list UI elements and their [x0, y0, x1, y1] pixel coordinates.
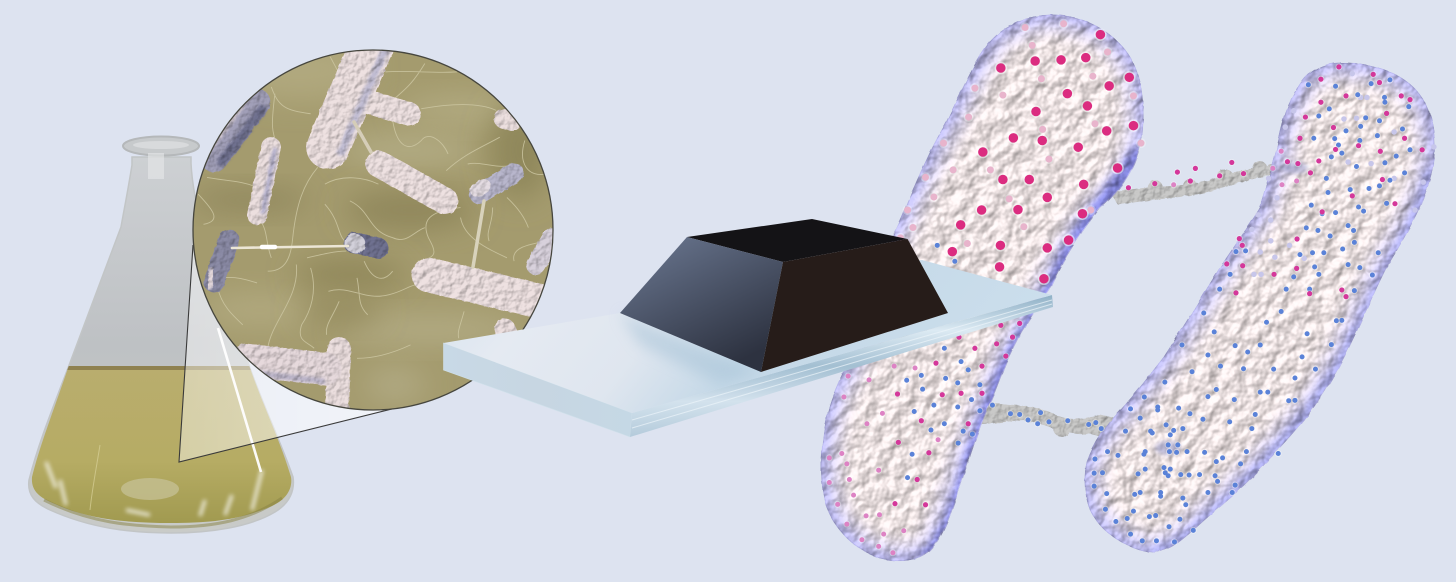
slide left edge	[444, 343, 632, 437]
chip right face	[761, 239, 948, 372]
liquid clouds	[190, 40, 552, 412]
slide top surface	[444, 260, 1052, 413]
glass slide	[444, 260, 1053, 437]
flask glass body	[29, 157, 293, 533]
pale pink dots	[900, 24, 1141, 243]
magenta dots	[895, 67, 1422, 505]
large magenta dots	[952, 35, 1133, 279]
pili between cells	[232, 122, 484, 267]
liquid	[32, 366, 291, 527]
blue dots	[907, 80, 1410, 542]
right bacterium	[1085, 63, 1434, 555]
pilus top	[1110, 158, 1292, 205]
magnification cone	[179, 245, 396, 462]
flask	[29, 136, 293, 533]
lavender dots	[1252, 74, 1434, 274]
flagella	[198, 57, 546, 358]
left bacterium	[821, 15, 1292, 561]
magnified circle	[190, 40, 553, 412]
chip: black trapezoid block	[620, 219, 948, 372]
junction shadows	[1155, 162, 1308, 455]
streak	[218, 328, 261, 472]
light magenta dots	[829, 151, 1297, 553]
pilus bottom	[975, 400, 1172, 452]
chip top face	[687, 219, 908, 262]
pyramid shadow on slide	[620, 313, 761, 384]
slide front edge	[630, 295, 1053, 437]
molecule dots	[829, 24, 1434, 553]
lens outline	[193, 50, 553, 410]
chip left face	[620, 237, 783, 372]
body	[821, 15, 1143, 561]
flask lip	[123, 136, 199, 179]
small cells	[206, 45, 552, 412]
